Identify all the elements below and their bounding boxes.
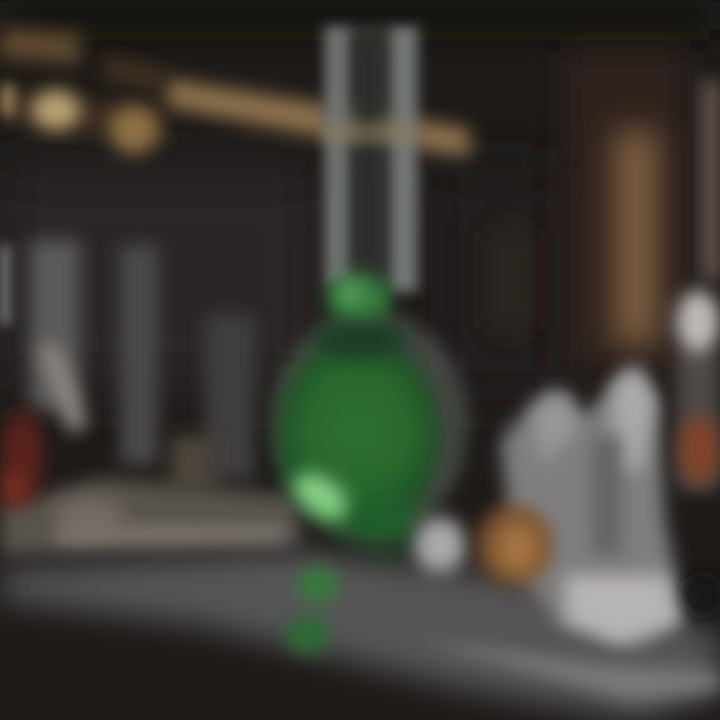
white crystals right xyxy=(414,365,685,645)
flask dark core xyxy=(276,337,440,533)
flask shoulder xyxy=(312,322,408,358)
clear glassware left xyxy=(0,240,300,555)
flask reflection xyxy=(298,567,338,603)
flask neck xyxy=(328,274,392,326)
flask glass rim xyxy=(272,311,468,539)
red liquid left xyxy=(0,411,44,508)
shelf lights xyxy=(0,28,470,157)
flask highlight xyxy=(285,464,359,530)
table surface xyxy=(0,550,720,720)
green flask xyxy=(272,274,468,653)
bottle right with red liquid xyxy=(676,290,720,615)
wooden panels on right xyxy=(495,50,720,370)
tall glass tube xyxy=(322,24,422,294)
amber flask xyxy=(477,505,553,585)
